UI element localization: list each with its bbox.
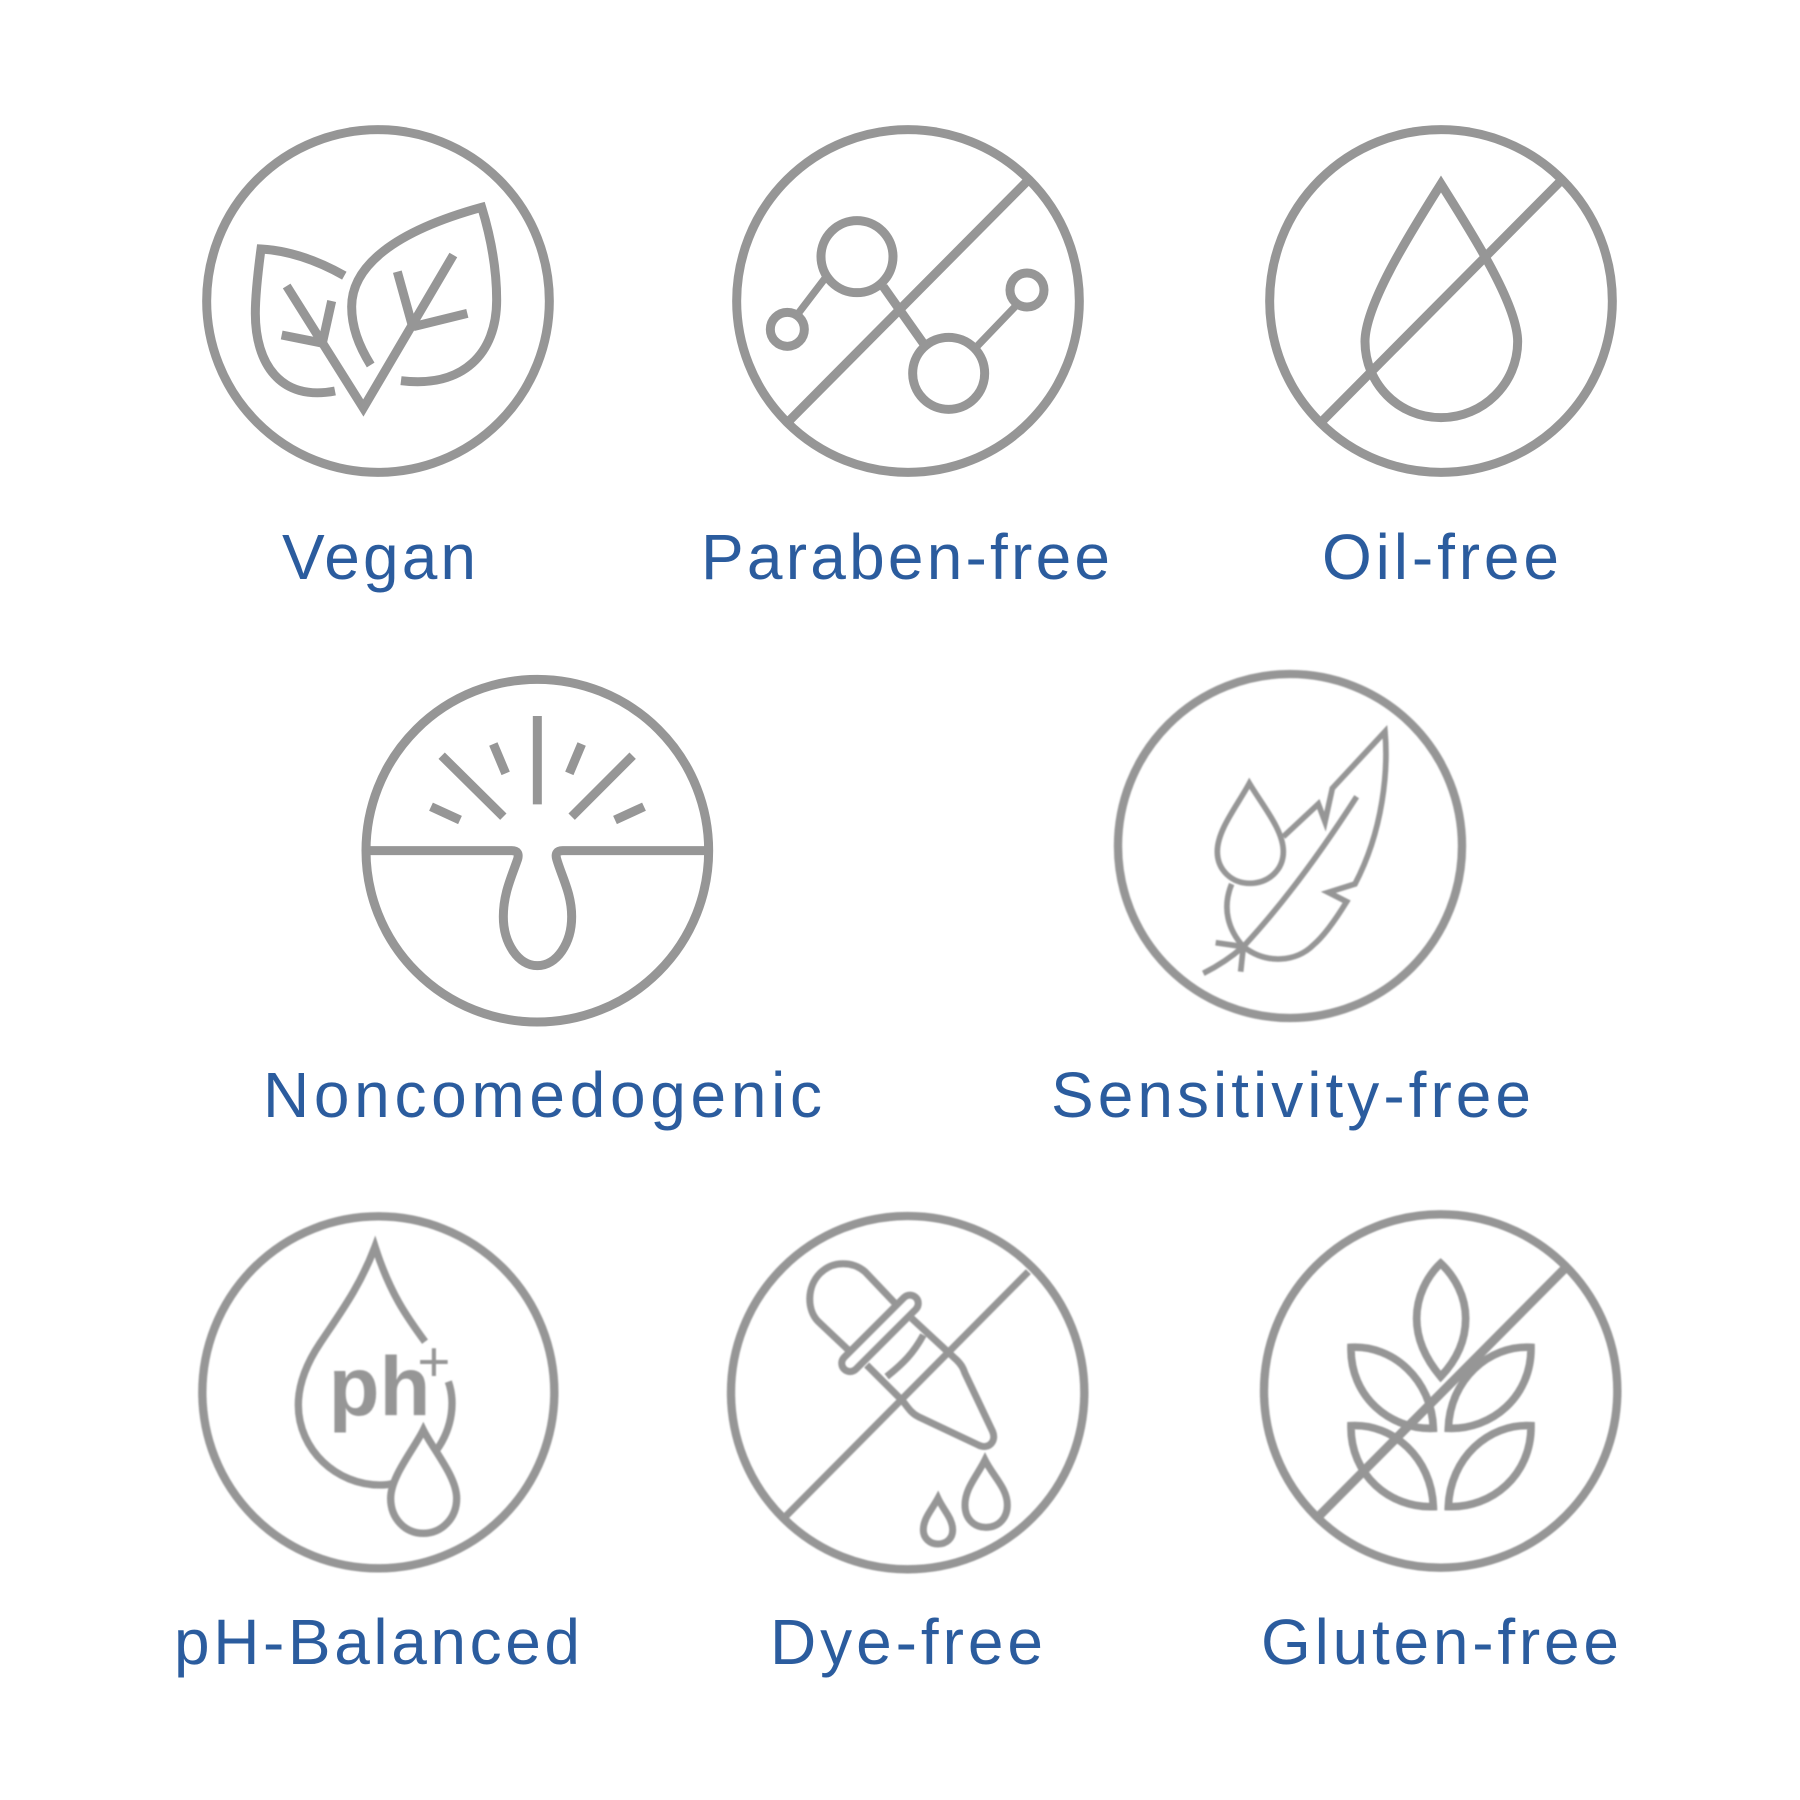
icon: sensitivity feather and drop <box>1118 674 1462 1018</box>
label: Oil-free: Oil-free <box>1322 521 1559 593</box>
label: Vegan: Vegan <box>282 521 476 593</box>
icon: pH balanced drop: + <box>417 1331 450 1394</box>
icon: pH balanced drop <box>202 1216 554 1568</box>
label: pH-Balanced: pH-Balanced <box>174 1606 580 1678</box>
label: Paraben-free: Paraben-free <box>701 521 1110 593</box>
icon: pH balanced drop: ph <box>329 1340 430 1433</box>
label: Noncomedogenic: Noncomedogenic <box>263 1059 822 1131</box>
icon: noncomedogenic pore <box>366 679 709 1022</box>
icon: paraben molecule crossed out <box>737 130 1079 472</box>
label: Sensitivity-free: Sensitivity-free <box>1051 1059 1531 1131</box>
label: Gluten-free: Gluten-free <box>1261 1606 1619 1678</box>
icon: oil drop crossed out <box>1270 130 1612 472</box>
label: Dye-free: Dye-free <box>770 1606 1043 1678</box>
icon: gluten wheat crossed out <box>1264 1214 1617 1568</box>
icon: dye dropper crossed out <box>731 1216 1084 1569</box>
icon: vegan leaves <box>207 130 549 472</box>
